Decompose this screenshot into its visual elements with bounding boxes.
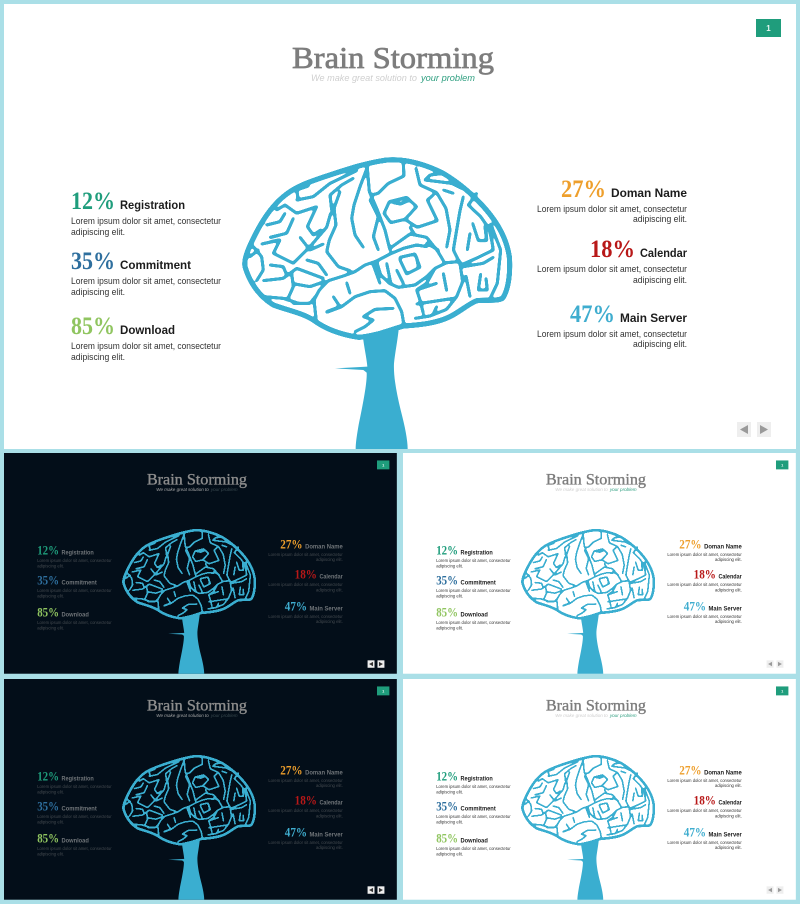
stat: 85% download: adipiscing elit. <box>37 852 64 857</box>
stat: 35% commitment <box>37 799 112 824</box>
stat: 27% domain name: adipiscing elit. <box>715 783 742 788</box>
stat: 12% registration <box>436 544 511 569</box>
stat: 27% domain name: Lorem ipsum dolor sit amet, consectetur <box>667 778 742 783</box>
stat: 12% registration <box>37 544 112 569</box>
stat: 27% domain name: adipiscing elit. <box>316 783 343 788</box>
stat: 12% registration: 12% <box>436 770 458 784</box>
stat: 27% domain name <box>537 176 687 225</box>
stat: 35% commitment: Lorem ipsum dolor sit amet, consectetur <box>37 588 112 593</box>
stat: 12% registration: Lorem ipsum dolor sit amet, consectetur <box>37 784 112 789</box>
stat: 27% domain name: 27% <box>280 538 303 552</box>
stat: 18% calendar: 18% <box>295 793 317 807</box>
stat: 12% registration: adipiscing elit. <box>436 790 463 795</box>
stat: 47% main server: adipiscing elit. <box>633 339 687 350</box>
stat: 18% calendar: Calendar <box>319 800 343 806</box>
stat: 18% calendar <box>268 567 343 592</box>
stat: 18% calendar: Lorem ipsum dolor sit amet, consectetur <box>268 582 343 587</box>
subtitle <box>555 487 637 492</box>
subtitle: your problem <box>609 713 637 718</box>
page badge <box>776 686 788 695</box>
stat: 85% download: Download <box>62 613 89 619</box>
stat: 27% domain name <box>268 538 343 562</box>
stat: 27% domain name: adipiscing elit. <box>715 557 742 562</box>
stat: 18% calendar: Calendar <box>718 800 742 806</box>
stat: 35% commitment: Commitment <box>461 580 496 586</box>
illustration: brain tree <box>123 756 255 900</box>
stat: 12% registration: Registration <box>62 777 94 783</box>
stat: 47% main server: adipiscing elit. <box>715 619 742 624</box>
stat: 27% domain name: adipiscing elit. <box>633 214 687 225</box>
stat: 47% main server: Main Server <box>310 607 343 613</box>
stat: 35% commitment <box>37 573 112 598</box>
stat: 18% calendar: Lorem ipsum dolor sit amet, consectetur <box>537 264 687 275</box>
stat: 18% calendar: 18% <box>590 236 635 263</box>
stat: 12% registration: adipiscing elit. <box>71 227 125 238</box>
stat: 35% commitment: 35% <box>71 248 115 275</box>
stat: 85% download: 85% <box>71 313 115 340</box>
stat: 85% download: Lorem ipsum dolor sit amet, consectetur <box>71 341 221 352</box>
stat: 12% registration: adipiscing elit. <box>37 564 64 569</box>
subtitle <box>156 487 238 492</box>
subtitle: your problem <box>420 73 475 84</box>
stat: 27% domain name: Lorem ipsum dolor sit amet, consectetur <box>268 778 343 783</box>
stat: 18% calendar: 18% <box>694 793 716 807</box>
stat: 27% domain name <box>268 764 343 788</box>
illustration: brain tree <box>123 530 255 674</box>
stat: 85% download <box>71 313 221 363</box>
stat: 27% domain name: 27% <box>280 764 303 778</box>
stat: 35% commitment: adipiscing elit. <box>37 819 64 824</box>
stat: 47% main server <box>268 600 343 624</box>
page badge: 1 <box>781 462 784 467</box>
stat: 47% main server: 47% <box>684 600 706 614</box>
stat: 18% calendar: Calendar <box>718 574 742 580</box>
illustration: brain tree <box>522 530 654 674</box>
stat: 35% commitment <box>71 248 221 298</box>
stat: 47% main server: Lorem ipsum dolor sit amet, consectetur <box>667 840 742 845</box>
stat: 85% download: Download <box>120 323 175 337</box>
stat: 47% main server: 47% <box>285 600 307 614</box>
page badge <box>776 460 788 469</box>
stat: 12% registration: Lorem ipsum dolor sit amet, consectetur <box>436 558 511 563</box>
stat: 35% commitment: Commitment <box>120 258 191 272</box>
panel: large white slide <box>4 4 796 449</box>
page badge: 1 <box>766 24 771 33</box>
stat: 35% commitment: Commitment <box>62 806 97 812</box>
stat: 18% calendar: 18% <box>694 567 716 581</box>
page badge <box>756 19 781 37</box>
stat: 85% download: adipiscing elit. <box>37 626 64 631</box>
subtitle: We make great solution to <box>311 73 417 84</box>
stat: 27% domain name: Doman Name <box>305 771 343 777</box>
stat: 35% commitment: 35% <box>37 799 59 813</box>
stat: 85% download <box>436 832 511 857</box>
stat: 35% commitment: 35% <box>436 799 458 813</box>
stat: 47% main server <box>667 600 742 624</box>
stat: 27% domain name: Doman Name <box>305 545 343 551</box>
page badge: 1 <box>382 462 385 467</box>
stat: 47% main server <box>537 301 687 350</box>
stat: 35% commitment: 35% <box>37 573 59 587</box>
stat: 12% registration: Registration <box>461 777 493 783</box>
stat: 85% download: adipiscing elit. <box>436 852 463 857</box>
stat: 12% registration: Lorem ipsum dolor sit amet, consectetur <box>436 784 511 789</box>
stat: 35% commitment: adipiscing elit. <box>71 287 125 298</box>
stat: 47% main server: 47% <box>570 301 615 328</box>
stat: 85% download: Download <box>461 839 488 845</box>
subtitle <box>555 713 637 718</box>
stat: 27% domain name: Doman Name <box>611 186 687 200</box>
stat: 18% calendar: adipiscing elit. <box>715 587 742 592</box>
stat: 35% commitment: 35% <box>436 573 458 587</box>
stat: 18% calendar: adipiscing elit. <box>316 813 343 818</box>
subtitle <box>156 713 238 718</box>
stat: 12% registration: Lorem ipsum dolor sit amet, consectetur <box>37 558 112 563</box>
stat: 27% domain name <box>667 538 742 562</box>
stat: 27% domain name: Doman Name <box>704 771 742 777</box>
title: Brain Storming <box>546 698 646 715</box>
title: Brain Storming <box>546 472 646 489</box>
stat: 27% domain name: Lorem ipsum dolor sit amet, consectetur <box>268 552 343 557</box>
stat: 12% registration: 12% <box>71 188 115 215</box>
stat: 18% calendar: adipiscing elit. <box>715 813 742 818</box>
stat: 18% calendar: Lorem ipsum dolor sit amet, consectetur <box>667 808 742 813</box>
navigation arrows <box>767 660 783 668</box>
stat: 35% commitment <box>436 573 511 598</box>
stat: 85% download: Lorem ipsum dolor sit amet, consectetur <box>436 620 511 625</box>
stat: 18% calendar: Lorem ipsum dolor sit amet, consectetur <box>667 582 742 587</box>
stat: 18% calendar: Calendar <box>319 574 343 580</box>
stat: 18% calendar <box>268 793 343 818</box>
stat: 35% commitment: Commitment <box>62 580 97 586</box>
stat: 35% commitment: Lorem ipsum dolor sit amet, consectetur <box>436 814 511 819</box>
stat: 12% registration <box>37 770 112 795</box>
panel: small dark slide bottom <box>4 679 397 900</box>
stat: 47% main server <box>268 826 343 850</box>
stat: 12% registration: Registration <box>461 551 493 557</box>
stat: 12% registration: 12% <box>37 544 59 558</box>
stat: 85% download: 85% <box>436 606 458 620</box>
stat: 85% download <box>37 606 112 631</box>
stat: 85% download: Download <box>461 613 488 619</box>
stat: 35% commitment: Lorem ipsum dolor sit amet, consectetur <box>71 276 221 287</box>
stat: 27% domain name: Lorem ipsum dolor sit amet, consectetur <box>667 552 742 557</box>
stat: 27% domain name: 27% <box>679 538 702 552</box>
stat: 85% download: 85% <box>37 606 59 620</box>
stat: 12% registration: 12% <box>436 544 458 558</box>
title: Brain Storming <box>292 40 494 75</box>
stat: 47% main server: Lorem ipsum dolor sit amet, consectetur <box>537 329 687 340</box>
subtitle: We make great solution to <box>156 487 209 492</box>
stat: 35% commitment <box>436 799 511 824</box>
subtitle: your problem <box>210 713 238 718</box>
stat: 27% domain name: Lorem ipsum dolor sit amet, consectetur <box>537 204 687 215</box>
stat: 47% main server: Lorem ipsum dolor sit amet, consectetur <box>268 840 343 845</box>
stat: 12% registration: adipiscing elit. <box>37 790 64 795</box>
stat: 12% registration: Lorem ipsum dolor sit amet, consectetur <box>71 216 221 227</box>
stat: 35% commitment: Commitment <box>461 806 496 812</box>
stat: 18% calendar <box>667 567 742 592</box>
stat: 27% domain name: 27% <box>561 176 606 203</box>
stat: 47% main server: adipiscing elit. <box>316 619 343 624</box>
stat: 12% registration: Registration <box>62 551 94 557</box>
page badge <box>377 460 389 469</box>
stat: 85% download: adipiscing elit. <box>71 352 125 363</box>
stat: 85% download <box>37 832 112 857</box>
subtitle: your problem <box>609 487 637 492</box>
subtitle: We make great solution to <box>555 487 608 492</box>
stat: 18% calendar <box>537 236 687 286</box>
stat: 27% domain name: 27% <box>679 764 702 778</box>
panel: small dark slide top <box>4 453 397 674</box>
page badge: 1 <box>781 688 784 693</box>
stat: 47% main server: 47% <box>684 826 706 840</box>
stat: 18% calendar: adipiscing elit. <box>316 587 343 592</box>
stat: 35% commitment: adipiscing elit. <box>436 819 463 824</box>
stat: 47% main server: Main Server <box>709 607 742 613</box>
subtitle <box>311 73 475 84</box>
stat: 47% main server: Main Server <box>709 833 742 839</box>
stat: 85% download: adipiscing elit. <box>436 626 463 631</box>
stat: 85% download: 85% <box>37 832 59 846</box>
navigation arrows <box>737 422 771 437</box>
stat: 85% download: Lorem ipsum dolor sit amet, consectetur <box>436 846 511 851</box>
stat: 35% commitment: adipiscing elit. <box>37 593 64 598</box>
subtitle: your problem <box>210 487 238 492</box>
navigation arrows <box>767 886 783 894</box>
stat: 12% registration: adipiscing elit. <box>436 564 463 569</box>
stat: 18% calendar <box>667 793 742 818</box>
page badge <box>377 686 389 695</box>
stat: 47% main server: Lorem ipsum dolor sit amet, consectetur <box>268 614 343 619</box>
stat: 12% registration <box>71 188 221 238</box>
title: Brain Storming <box>147 698 247 715</box>
page badge: 1 <box>382 688 385 693</box>
stat: 35% commitment: Lorem ipsum dolor sit amet, consectetur <box>37 814 112 819</box>
stat: 12% registration <box>436 770 511 795</box>
stat: 47% main server <box>667 826 742 850</box>
stat: 27% domain name: adipiscing elit. <box>316 557 343 562</box>
subtitle: We make great solution to <box>156 713 209 718</box>
stat: 18% calendar: adipiscing elit. <box>633 275 687 286</box>
stat: 18% calendar: Calendar <box>640 246 687 260</box>
stat: 27% domain name: Doman Name <box>704 545 742 551</box>
stat: 85% download: 85% <box>436 832 458 846</box>
stat: 27% domain name <box>667 764 742 788</box>
stat: 47% main server: Main Server <box>620 311 687 325</box>
stat: 47% main server: Main Server <box>310 833 343 839</box>
stat: 35% commitment: Lorem ipsum dolor sit amet, consectetur <box>436 588 511 593</box>
stat: 47% main server: adipiscing elit. <box>715 845 742 850</box>
stat: 47% main server: 47% <box>285 826 307 840</box>
stat: 85% download <box>436 606 511 631</box>
stat: 47% main server: adipiscing elit. <box>316 845 343 850</box>
navigation arrows <box>368 660 384 668</box>
stat: 12% registration: 12% <box>37 770 59 784</box>
navigation arrows <box>368 886 384 894</box>
title: Brain Storming <box>147 472 247 489</box>
subtitle: We make great solution to <box>555 713 608 718</box>
stat: 85% download: Lorem ipsum dolor sit amet, consectetur <box>37 620 112 625</box>
panel: small white slide bottom <box>403 679 796 900</box>
stat: 85% download: Download <box>62 839 89 845</box>
illustration: brain tree <box>522 756 654 900</box>
stat: 18% calendar: 18% <box>295 567 317 581</box>
illustration: brain tree <box>245 160 510 449</box>
stat: 85% download: Lorem ipsum dolor sit amet, consectetur <box>37 846 112 851</box>
stat: 47% main server: Lorem ipsum dolor sit amet, consectetur <box>667 614 742 619</box>
stat: 35% commitment: adipiscing elit. <box>436 593 463 598</box>
stat: 18% calendar: Lorem ipsum dolor sit amet, consectetur <box>268 808 343 813</box>
stat: 12% registration: Registration <box>120 198 185 212</box>
panel: small white slide top <box>403 453 796 674</box>
